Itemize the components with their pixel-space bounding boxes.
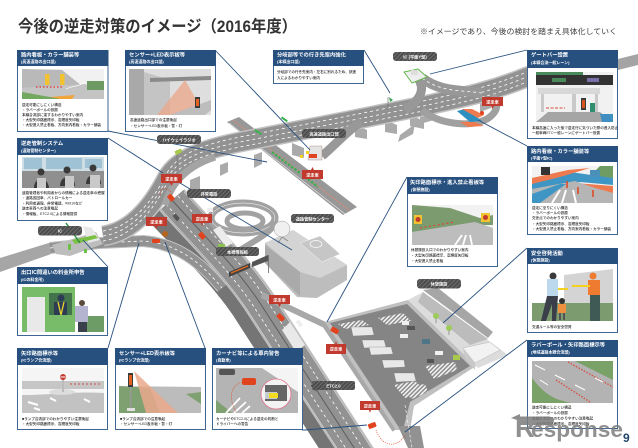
- heading: 路内看板・カラー舗装等: [531, 147, 590, 155]
- heading: [17, 50, 108, 66]
- note: ※イメージであり、今後の検討を踏まえ具体化していく: [420, 26, 617, 36]
- red labels: wrong-way vehicle: 逆走車: [150, 218, 163, 225]
- main highway side wall: [160, 210, 352, 448]
- IC flat Y toll: [404, 69, 427, 83]
- illustration: merge lanes: [532, 361, 613, 403]
- top mid green gates: [254, 116, 288, 135]
- body text: [277, 69, 356, 80]
- body text: ・ラバーポールの設置: [22, 107, 58, 112]
- body text: 一般車両ETC一般レーンにゲートバー設置: [532, 130, 601, 135]
- bridge piers: [190, 100, 491, 362]
- illustration: staff handing out leaflet: [532, 269, 613, 321]
- red labels: wrong-way vehicle: 逆走車: [165, 175, 178, 182]
- heading: (高速道路の出口部): [129, 58, 164, 64]
- label: emergency phone: [187, 189, 231, 198]
- body text: [130, 117, 183, 128]
- body text: ・大型進入禁止看板、方向案内看板・カラー舗装: [532, 226, 611, 231]
- heading: 路内看板・カラー舗装等: [21, 50, 80, 58]
- body text: ■ランプ合流部でのわかりやすい注意喚起: [22, 416, 89, 421]
- red labels: wrong-way vehicle: 逆走車: [306, 171, 319, 178]
- heading: (本線出口部): [277, 58, 300, 64]
- body text: 逆走可能にしにくい構造: [22, 102, 62, 107]
- heading: [407, 177, 498, 194]
- body text: ・大型進入禁止看板、方向案内看板・カラー舗装: [22, 122, 101, 127]
- heading: [17, 267, 108, 284]
- body text: [411, 247, 469, 263]
- body text: 分岐部での行き先案内・左右に別れるため、誤進: [277, 69, 356, 74]
- heading: センサー+LED表示板等: [119, 349, 176, 357]
- label: highway radio: [157, 135, 201, 144]
- label: control center: 道路管制センター: [296, 216, 329, 222]
- heading: [17, 138, 108, 155]
- lower interchange road: [50, 241, 222, 288]
- red labels: wrong-way vehicle: 逆走車: [273, 296, 286, 303]
- parked cars: [400, 321, 460, 363]
- red labels: wrong-way vehicle: 逆走車: [486, 98, 499, 105]
- body text: 道路管理者や利用者からの情報による逆走車の把握: [22, 190, 105, 195]
- heading: (休憩施設): [531, 256, 550, 262]
- red labels: wrong-way vehicle: 逆走車: [364, 402, 376, 409]
- traffic control center building: [265, 221, 347, 298]
- label: IC flat Y: IC (平面Y型): [403, 54, 427, 60]
- heading: ラバーポール・矢印路面標示等: [531, 340, 606, 348]
- heading: 逆走管制システム: [21, 139, 64, 147]
- illustration: sensor pole with beam: [119, 368, 201, 413]
- heading: (地域道路本線合流部): [531, 348, 570, 354]
- title: 今後の逆走対策のイメージ（2016年度）: [18, 17, 297, 36]
- body text: 本線高速に入った後で逆走行に気づいた際の進入防止: [532, 125, 619, 130]
- heading: 分岐部等での行き先案内強化: [277, 50, 347, 58]
- heading: [115, 348, 206, 365]
- loop interchange: [211, 203, 276, 250]
- watermark: Response logo: [511, 413, 623, 443]
- label: rest area: 休憩施設: [431, 280, 448, 288]
- heading: 安全啓発活動: [531, 249, 563, 257]
- rest area parking: [325, 300, 476, 448]
- label: left IC: IC: [58, 228, 62, 234]
- body text: ・大型矢印路面標示、高輝度矢印板: [22, 117, 80, 122]
- label: IC flat Y: [393, 52, 437, 61]
- body text: ・大型矢印路面標示、高輝度矢印板: [411, 252, 469, 258]
- heading: (高速道路の出口部): [21, 58, 56, 64]
- body text: [532, 125, 619, 135]
- illustration: toll attendant and driver: [22, 287, 104, 332]
- heading: ゲートバー設置: [531, 50, 569, 58]
- far right road: [618, 54, 638, 70]
- body text: [22, 190, 105, 216]
- body text: [532, 404, 593, 426]
- watermark: Response logo: R: [515, 413, 534, 443]
- heading: (休憩施設): [411, 186, 430, 192]
- body text: ・センサー+LED表示板・警・灯: [130, 123, 183, 128]
- body text: [216, 416, 279, 426]
- overhead sign on highway: [229, 255, 269, 277]
- side road along highway: [262, 295, 395, 430]
- heading: (本線合流一般レーン): [531, 59, 570, 65]
- diagonal ramp road: [227, 117, 357, 215]
- heading: (道路管制センター): [21, 147, 56, 153]
- heading: (ICランプ合流部): [119, 356, 150, 362]
- body text: 交差点でのわかりやすい案内: [532, 215, 579, 220]
- body text: ・道路巡回車、パトロールカー: [22, 195, 73, 200]
- panel: toll booth reporting: [17, 267, 108, 336]
- illustration: ramp merge markings: [22, 368, 104, 413]
- illustration: toll gate: [536, 72, 613, 122]
- illustration: navigation warning: [216, 368, 298, 413]
- body text: 入によるわかりやすい案内: [277, 75, 320, 80]
- body text: [120, 416, 173, 426]
- body text: ・大型進入禁止看板: [411, 258, 444, 263]
- heading: カーナビ等による車内警告: [216, 349, 279, 357]
- label: ETC 2.0: [312, 381, 355, 390]
- panel: safety awareness activity: [527, 248, 618, 332]
- body text: 逆走車両への注意喚起: [22, 206, 58, 210]
- body text: 高速道路出口部での注意喚起: [130, 117, 177, 122]
- body text: ・大型矢印路面標示、高輝度矢印板: [532, 221, 590, 226]
- toll booth at highway exit: [300, 146, 322, 160]
- label: main line info board: [216, 247, 259, 256]
- body text: 逆走可能にしにくい構造: [532, 404, 572, 410]
- trucks: [351, 327, 416, 382]
- heading: (平面Y型IC): [531, 154, 553, 160]
- label: control center: [291, 214, 334, 223]
- heading: [527, 146, 618, 162]
- right junction roads: [405, 78, 497, 124]
- heading: 矢印路面標示・進入禁止看板等: [410, 178, 485, 186]
- heading: [17, 348, 108, 365]
- body text: 休憩施設入口でのわかりやすい案内: [411, 247, 469, 252]
- page number: 9: [623, 431, 630, 445]
- body text: 交通ルール等の安全啓発: [532, 324, 572, 329]
- panel: guide signs and coloured pavement, highway exit: [17, 50, 108, 132]
- inner connecting curve: [165, 157, 215, 205]
- body text: [532, 205, 611, 231]
- body text: カーナビやETC2.0による逆走の判断と: [216, 416, 279, 421]
- label: highway radio: ハイウェイラジオ: [162, 136, 196, 144]
- body text: ・センサー+LED表示板・警・灯: [120, 421, 173, 426]
- body text: ・大型矢印路面標示、高輝度矢印板: [532, 421, 590, 426]
- ramp to toll: [322, 122, 362, 156]
- blue and orange pavement: [457, 109, 484, 127]
- rest area building: [408, 288, 508, 370]
- red wrong-way cars: [152, 111, 484, 444]
- panel: in-car warning via car navigation: [212, 348, 303, 430]
- panel: guide signs and coloured pavement, flat Y IC: [527, 146, 618, 234]
- heading: センサー+LED表示板等: [129, 50, 186, 58]
- panel: wrong-way control system: [17, 138, 108, 220]
- body text: 逆走に至りにくい構造: [532, 205, 568, 210]
- label: highway exit: [302, 129, 346, 138]
- body text: ■ランプ合流部での注意喚起: [120, 416, 166, 421]
- heading: [125, 50, 216, 66]
- body text: ・大型矢印路面標示、高輝度矢印板: [22, 421, 80, 426]
- body text: ドライバーへの警告: [216, 421, 249, 426]
- illustration: overpass with sensor beam: [129, 69, 211, 115]
- label: main line info board: 本線情報板: [227, 248, 249, 256]
- illustration: rest area entrance: [412, 205, 493, 245]
- heading: [527, 50, 618, 68]
- heading: 矢印路面標示等: [21, 349, 59, 357]
- elevated upper road: [103, 72, 530, 241]
- heading: [527, 340, 618, 357]
- heading: (ICランプ合流部): [21, 356, 52, 362]
- label: highway exit: 高速道路出口部: [309, 130, 339, 138]
- body text: ・利用者通報、非常電話、#9910など: [22, 200, 83, 206]
- left approach road: [0, 242, 54, 272]
- body text: ・情報板、ETC2.0による情報提供: [22, 211, 78, 216]
- label: emergency phone: 非常電話: [201, 190, 218, 198]
- panel: sensor and LED board, highway exit: [125, 50, 216, 132]
- heading: (ICの料金所): [21, 276, 44, 282]
- label: left IC: [38, 226, 82, 236]
- illustration: control room operators: [22, 157, 104, 188]
- heading: [212, 348, 303, 365]
- heading: [273, 50, 364, 66]
- main highway: [160, 192, 374, 448]
- panel: rubber poles and arrow markings, merging section: [527, 340, 618, 428]
- illustration: ramp with signs: [22, 69, 104, 99]
- red labels: wrong-way vehicle: [146, 97, 503, 413]
- panel: arrow road markings, IC ramp: [17, 348, 108, 430]
- heading: (自動車): [216, 356, 231, 362]
- heading: 出口IC間違いの料金所申告: [21, 268, 85, 276]
- label: ETC 2.0: ETC2.0: [326, 384, 341, 388]
- illustration: coloured intersection: [532, 166, 613, 203]
- leader lines: [83, 50, 527, 432]
- watermark: Response logo: esponse: [531, 417, 623, 442]
- red labels: wrong-way vehicle: 逆走車: [196, 215, 208, 222]
- panel: arrow markings and no-entry signs, rest area: [407, 177, 498, 266]
- red labels: wrong-way vehicle: 逆走車: [330, 346, 342, 353]
- roadside flags and poles: [177, 97, 393, 400]
- other vehicles: [162, 148, 319, 391]
- body text: 本線合流部に達するわかりやすい案内: [22, 112, 83, 117]
- left IC toll: [52, 223, 103, 256]
- label: rest area: [417, 279, 461, 288]
- body text: [22, 102, 101, 127]
- body text: [22, 416, 89, 426]
- body text: 本線合流部でのわかりやすい注意喚起: [532, 416, 593, 420]
- panel: sensor and LED board, IC ramp: [115, 348, 206, 430]
- body text: ・ラバーポールの設置: [532, 210, 568, 215]
- body text: ・ラバーポールの設置: [532, 410, 568, 415]
- panel: destination guidance at junctions: [273, 50, 364, 84]
- heading: [527, 248, 618, 264]
- panel: gate bar installation: [527, 50, 619, 138]
